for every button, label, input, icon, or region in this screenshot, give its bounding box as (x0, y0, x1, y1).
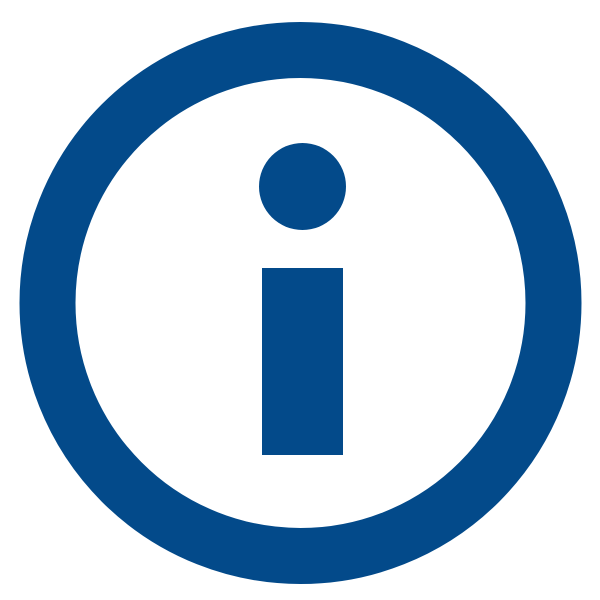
icon stem of the letter i (262, 268, 343, 455)
icon ring (48, 50, 554, 556)
icon dot of the letter i (259, 143, 346, 230)
